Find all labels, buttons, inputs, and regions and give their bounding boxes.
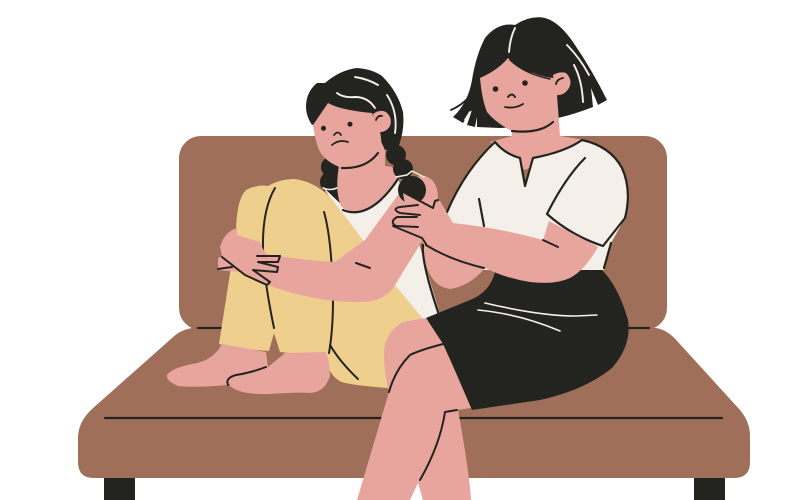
- skirt highlights: [478, 303, 597, 331]
- skirt: [426, 268, 629, 410]
- braid over shoulder: [323, 171, 426, 204]
- face details: [321, 116, 382, 168]
- foot line: [227, 367, 266, 385]
- neckline: [343, 179, 398, 212]
- trouser crease lines: [263, 188, 358, 379]
- girl arm and clasped hands: [218, 176, 438, 302]
- blouse outline: [447, 140, 628, 268]
- brown gap beside neck: [385, 154, 393, 167]
- neck and chest: [337, 135, 400, 212]
- blouse: [425, 140, 628, 270]
- near braid: [386, 145, 413, 179]
- ear: [553, 72, 570, 95]
- neck: [490, 95, 585, 170]
- arm and finger lines: [218, 256, 370, 285]
- hair: [306, 68, 403, 150]
- face: [480, 58, 557, 133]
- face details: [493, 60, 563, 132]
- face: [313, 103, 381, 168]
- mother's arm: [393, 193, 598, 289]
- right foot: [230, 352, 330, 394]
- leg lines: [389, 344, 457, 480]
- sofa: [78, 136, 750, 500]
- mother: [357, 17, 629, 500]
- left foot: [167, 344, 268, 387]
- wisp of hair: [451, 98, 468, 110]
- far braid: [320, 157, 345, 214]
- hair highlights: [337, 77, 396, 133]
- trousers: [219, 179, 424, 388]
- girl: [167, 68, 441, 394]
- hair highlights: [465, 28, 589, 120]
- arm lines and fingers: [393, 193, 558, 318]
- hair back: [453, 17, 607, 128]
- ear: [373, 111, 391, 132]
- tank top: [322, 178, 441, 322]
- front crossed leg and back leg: [418, 410, 471, 500]
